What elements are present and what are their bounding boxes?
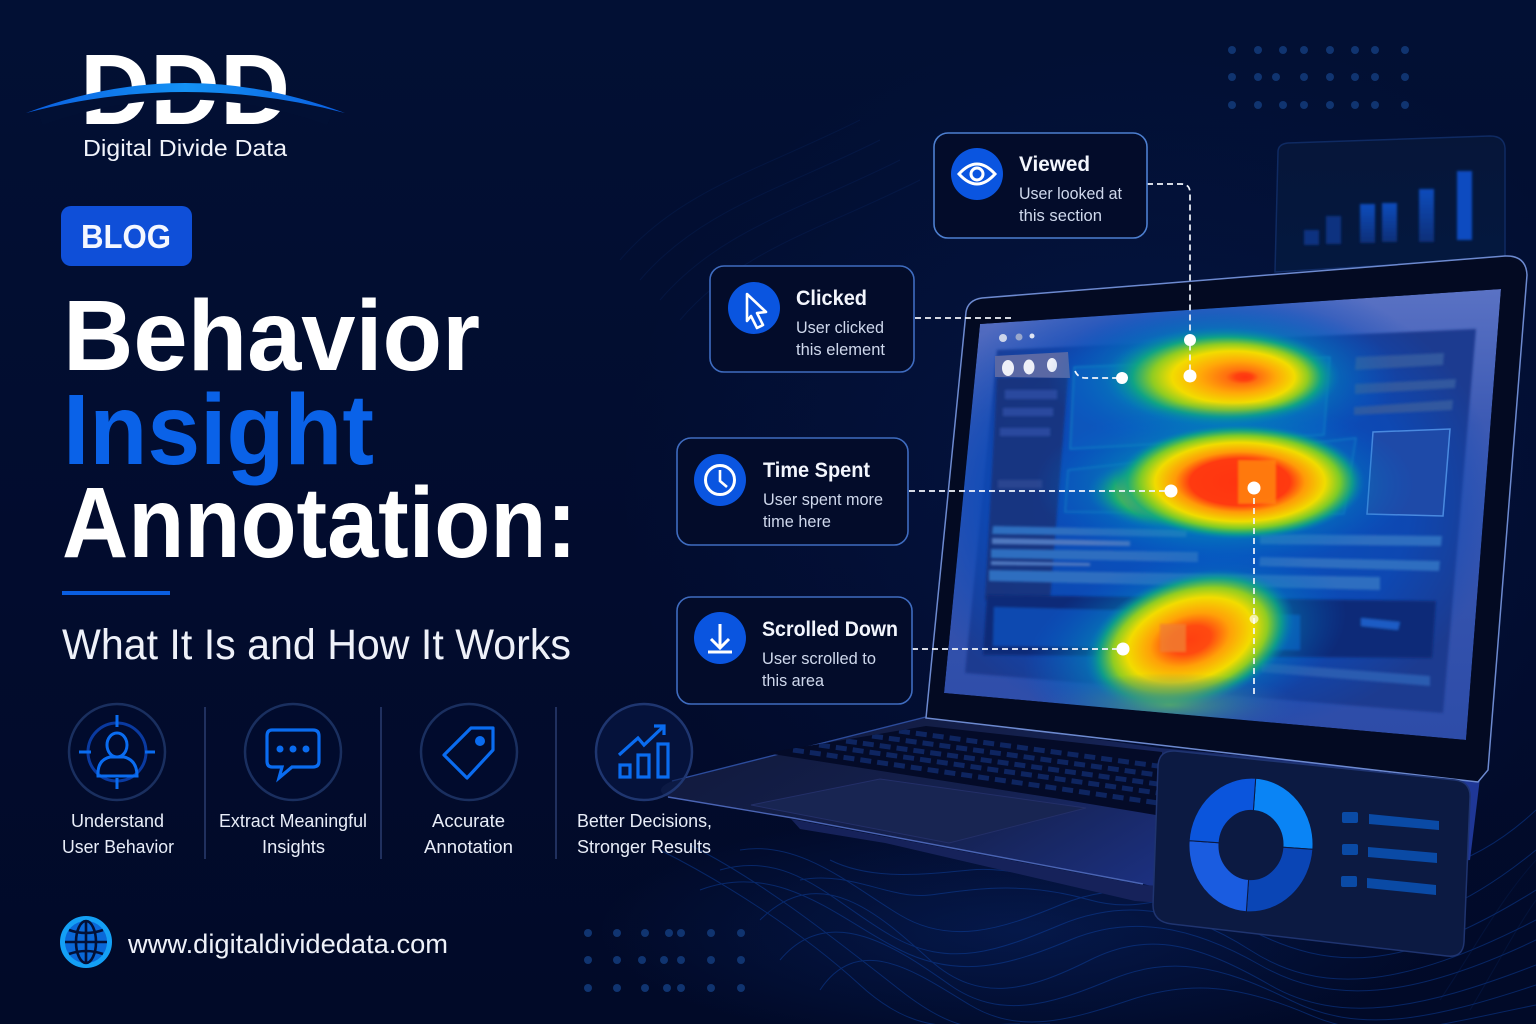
website address: www.digitaldividedata.com xyxy=(127,929,448,959)
side card on screen xyxy=(1367,429,1450,516)
title: Behavior xyxy=(63,280,480,392)
page panel on screen xyxy=(965,329,1476,713)
background chart panel xyxy=(1275,136,1505,272)
laptop xyxy=(661,256,1527,903)
laptop lid xyxy=(926,256,1527,782)
central blue wash xyxy=(952,300,1485,722)
connector lines xyxy=(909,184,1254,697)
feature: understand user behavior xyxy=(62,704,174,857)
callout: clicked xyxy=(710,266,914,372)
text lines on screen xyxy=(989,526,1442,590)
callout: clicked: this element xyxy=(796,341,885,359)
trackpad xyxy=(751,779,1086,843)
logo wordmark: Digital Divide Data xyxy=(83,135,287,161)
title divider xyxy=(62,591,170,595)
feature: better decisions xyxy=(577,704,712,857)
feature: extract meaningful insights: Insights xyxy=(262,836,325,857)
title: Insight xyxy=(63,374,374,486)
feature: understand user behavior: Understand xyxy=(71,810,164,831)
feature: better decisions: Better Decisions, xyxy=(577,810,712,831)
heat zone: scrolled xyxy=(1038,565,1334,716)
hero panel on screen xyxy=(1070,357,1330,449)
callout: time spent: time here xyxy=(763,513,831,531)
callout: time spent: User spent more xyxy=(763,491,883,509)
lower dark panel on screen xyxy=(983,595,1436,686)
logo letters: DDD xyxy=(80,34,290,146)
feature: better decisions: Stronger Results xyxy=(577,836,711,857)
decorative dot grid: top right xyxy=(1228,46,1409,109)
callout: viewed: this section xyxy=(1019,207,1102,225)
feature separators xyxy=(205,707,556,859)
donut legend xyxy=(1341,812,1439,895)
feature: accurate annotation xyxy=(421,704,517,857)
callout: scrolled down: User scrolled to xyxy=(762,650,876,668)
badge: blog xyxy=(61,206,192,266)
callout: viewed: User looked at xyxy=(1019,185,1122,203)
middle panel on screen xyxy=(1065,438,1356,514)
feature: accurate annotation: Annotation xyxy=(424,836,513,857)
website xyxy=(62,918,448,966)
heat zone: viewed xyxy=(1052,312,1372,432)
callout: time spent xyxy=(677,438,908,545)
logo xyxy=(26,34,345,161)
callout: clicked: User clicked xyxy=(796,319,884,337)
logo arc xyxy=(26,83,345,118)
callout: clicked: Clicked xyxy=(796,287,867,310)
icon: eye xyxy=(951,148,1003,200)
callout: time spent: Time Spent xyxy=(763,459,870,482)
right column lines on screen xyxy=(1354,353,1456,415)
callout: viewed: Viewed xyxy=(1019,153,1090,176)
badge: blog: BLOG xyxy=(81,218,171,255)
callout: scrolled down xyxy=(677,597,912,704)
icon: globe xyxy=(62,918,110,966)
subtitle: What It Is and How It Works xyxy=(62,621,571,669)
callout: viewed xyxy=(934,133,1147,238)
decorative dot grid: bottom centre xyxy=(584,929,745,992)
faint top-left waves xyxy=(620,120,1536,1010)
background wave lines xyxy=(660,810,1536,1024)
feature: accurate annotation: Accurate xyxy=(432,810,505,831)
heat glow at screen foot xyxy=(1074,674,1267,720)
laptop front lip xyxy=(791,819,1162,903)
feature: extract meaningful insights xyxy=(219,704,367,857)
icon: clock xyxy=(694,454,746,506)
keyboard xyxy=(766,726,1165,816)
heat zone: time spent xyxy=(1052,404,1385,555)
callout: scrolled down: this area xyxy=(762,672,825,690)
sidebar on screen xyxy=(985,376,1068,600)
feature: understand user behavior: User Behavior xyxy=(62,836,174,857)
feature icon row xyxy=(62,704,712,857)
window controls and toolbar xyxy=(995,334,1070,378)
laptop base xyxy=(661,716,1480,903)
title: Annotation: xyxy=(62,467,577,579)
laptop screen xyxy=(944,289,1501,740)
icon: download arrow xyxy=(694,612,746,664)
dashboard card with donut chart xyxy=(1153,751,1470,956)
feature: extract meaningful insights: Extract Meaningful xyxy=(219,810,367,831)
icon: cursor xyxy=(728,282,780,334)
donut chart xyxy=(1184,774,1318,916)
connector markers xyxy=(1116,334,1260,656)
title xyxy=(62,280,577,579)
callout: scrolled down: Scrolled Down xyxy=(762,618,898,641)
